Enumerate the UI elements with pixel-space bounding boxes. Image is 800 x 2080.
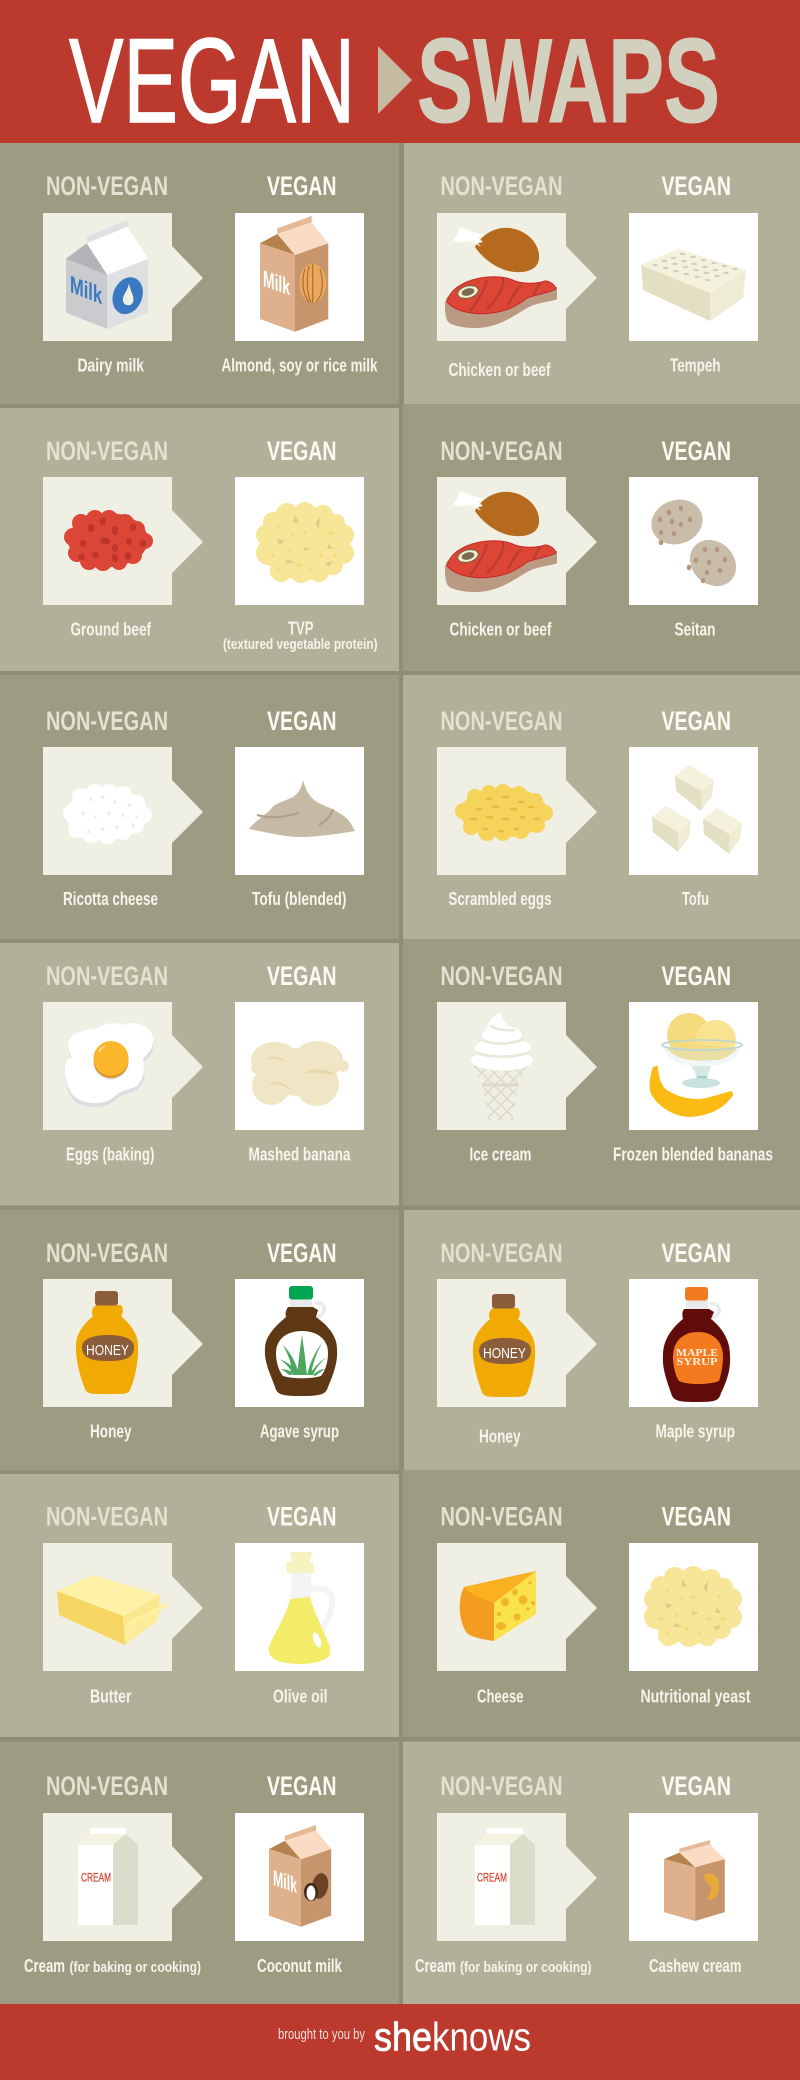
icon: ground beef xyxy=(43,477,203,605)
caption: textured vegetable protein: (textured vegetable protein) xyxy=(223,636,378,653)
panel: cream to cashew cream xyxy=(403,1742,800,2004)
heading: non-vegan: NON-VEGAN xyxy=(46,171,168,201)
icon: coconut milk carton xyxy=(235,1813,364,1941)
heading: vegan: VEGAN xyxy=(267,1771,336,1801)
panel: cheese to nutritional yeast xyxy=(403,1470,800,1737)
panel background xyxy=(0,1210,399,1470)
panel: eggs to mashed banana xyxy=(0,943,399,1206)
icon: chicken and steak xyxy=(437,213,597,341)
icon: tempeh block xyxy=(629,213,758,341)
heading: non-vegan: NON-VEGAN xyxy=(46,1771,168,1801)
header banner xyxy=(0,0,800,148)
heading: non-vegan: NON-VEGAN xyxy=(46,706,168,736)
icon: maple syrup bottle xyxy=(629,1279,758,1407)
panel background xyxy=(0,408,399,671)
panel background xyxy=(403,939,800,1206)
panel: honey to agave syrup xyxy=(0,1210,399,1470)
caption: chicken or beef: Chicken or beef xyxy=(450,620,552,640)
caption: cream for baking or cooking: Cream xyxy=(24,1956,65,1976)
heading: vegan: VEGAN xyxy=(267,1502,336,1532)
panel background xyxy=(403,404,800,671)
heading: non-vegan: NON-VEGAN xyxy=(440,1771,562,1801)
panel background xyxy=(404,143,800,404)
heading: non-vegan: NON-VEGAN xyxy=(440,961,562,991)
caption: olive oil: Olive oil xyxy=(273,1686,328,1706)
icon: milk carton xyxy=(43,213,203,341)
icon: cashew cream carton xyxy=(629,1813,758,1941)
caption: honey: Honey xyxy=(90,1422,132,1442)
icon: banana ice cream and banana xyxy=(629,1002,758,1130)
icon: honey bottle: HONEY xyxy=(86,1342,129,1359)
icon: fried egg xyxy=(43,1002,203,1130)
sheknows logo wordmark: knows xyxy=(432,2016,531,2060)
panel background xyxy=(0,675,399,939)
icon: maple syrup bottle: MAPLE xyxy=(676,1348,718,1359)
heading: non-vegan: NON-VEGAN xyxy=(440,436,562,466)
icon: ricotta cheese xyxy=(43,747,203,875)
icon: maple syrup bottle: SYRUP xyxy=(676,1357,718,1368)
caption: scrambled eggs: Scrambled eggs xyxy=(448,889,552,909)
heading: non-vegan: NON-VEGAN xyxy=(440,171,562,201)
panel: ground beef to TVP xyxy=(0,408,399,671)
caption: tofu blended: Tofu (blended) xyxy=(252,889,347,909)
heading: non-vegan: NON-VEGAN xyxy=(46,961,168,991)
heading: vegan: VEGAN xyxy=(662,1502,731,1532)
caption: butter: Butter xyxy=(90,1686,132,1706)
icon: tofu cubes xyxy=(629,747,758,875)
icon: blended tofu xyxy=(235,747,364,875)
heading: vegan: VEGAN xyxy=(267,436,336,466)
heading: vegan: VEGAN xyxy=(662,436,731,466)
icon: honey bottle xyxy=(437,1279,597,1407)
icon: ice cream cone xyxy=(437,1002,597,1130)
heading: non-vegan: NON-VEGAN xyxy=(46,436,168,466)
panel background xyxy=(0,143,399,404)
heading: non-vegan: NON-VEGAN xyxy=(440,1502,562,1532)
caption: almond soy or rice milk: Almond, soy or rice milk xyxy=(222,356,378,376)
heading: vegan: VEGAN xyxy=(267,171,336,201)
panel background xyxy=(403,675,800,939)
heading: vegan: VEGAN xyxy=(267,706,336,736)
panel: butter to olive oil xyxy=(0,1474,399,1737)
sheknows logo wordmark: she xyxy=(374,2016,432,2060)
panel: chicken or beef to tempeh xyxy=(404,143,800,404)
heading: non-vegan: NON-VEGAN xyxy=(46,1238,168,1268)
caption: coconut milk: Coconut milk xyxy=(257,1956,343,1976)
heading: non-vegan: NON-VEGAN xyxy=(440,706,562,736)
footer credit text: brought to you by xyxy=(278,2026,365,2043)
caption: cream for baking or cooking: Cream xyxy=(415,1956,456,1976)
caption: honey: Honey xyxy=(479,1426,520,1446)
panel background xyxy=(0,943,399,1206)
caption: cream for baking or cooking: (for baking or cooking) xyxy=(460,1959,592,1976)
caption: mashed banana: Mashed banana xyxy=(248,1144,351,1164)
panel: honey to maple syrup xyxy=(404,1210,800,1470)
panel background xyxy=(403,1470,800,1737)
panel background xyxy=(0,1742,399,2004)
caption: tofu: Tofu xyxy=(682,889,709,909)
icon: cream carton xyxy=(43,1813,203,1941)
icon: honey bottle: HONEY xyxy=(483,1345,526,1362)
heading: vegan: VEGAN xyxy=(267,961,336,991)
icon: textured vegetable protein xyxy=(235,477,364,605)
title arrow xyxy=(378,46,412,114)
heading: vegan: VEGAN xyxy=(662,1238,731,1268)
footer banner xyxy=(0,2004,800,2080)
caption: nutritional yeast: Nutritional yeast xyxy=(640,1686,751,1706)
icon: cream carton xyxy=(437,1813,597,1941)
panel: cream to coconut milk xyxy=(0,1742,399,2004)
icon: almond milk carton xyxy=(235,213,364,341)
caption: eggs baking: Eggs (baking) xyxy=(66,1144,154,1164)
heading: non-vegan: NON-VEGAN xyxy=(440,1238,562,1268)
caption: cashew cream: Cashew cream xyxy=(649,1956,742,1976)
icon: butter stick xyxy=(43,1543,203,1671)
heading: non-vegan: NON-VEGAN xyxy=(46,1502,168,1532)
heading: vegan: VEGAN xyxy=(662,961,731,991)
caption: tempeh: Tempeh xyxy=(670,356,720,376)
heading: vegan: VEGAN xyxy=(662,1771,731,1801)
icon: cheese wedge xyxy=(437,1543,597,1671)
caption: TVP: TVP xyxy=(288,618,314,638)
title word: vegan: VEGAN xyxy=(69,14,355,148)
icon: milk carton: Milk xyxy=(70,271,102,310)
panel background xyxy=(404,1210,800,1470)
panel: dairy milk to almond milk xyxy=(0,143,399,404)
heading: vegan: VEGAN xyxy=(267,1238,336,1268)
panel: ice cream to frozen blended bananas xyxy=(403,939,800,1206)
panel background xyxy=(0,1474,399,1737)
caption: cream for baking or cooking: (for baking or cooking) xyxy=(70,1959,201,1976)
caption: maple syrup: Maple syrup xyxy=(656,1422,735,1442)
caption: ice cream: Ice cream xyxy=(470,1144,532,1164)
icon: coconut milk carton: Milk xyxy=(273,1866,297,1898)
panel: ricotta cheese to blended tofu xyxy=(0,675,399,939)
caption: ricotta cheese: Ricotta cheese xyxy=(63,889,158,909)
icon: agave syrup bottle xyxy=(235,1279,364,1407)
icon: cream carton: CREAM xyxy=(477,1872,507,1884)
icon: olive oil bottle xyxy=(235,1543,364,1671)
heading: vegan: VEGAN xyxy=(662,171,731,201)
icon: honey bottle xyxy=(43,1279,203,1407)
panel: scrambled eggs to tofu xyxy=(403,675,800,939)
icon: almond milk carton: Milk xyxy=(263,267,290,301)
icon: seitan pieces xyxy=(629,477,758,605)
heading: vegan: VEGAN xyxy=(662,706,731,736)
caption: dairy milk: Dairy milk xyxy=(78,356,145,376)
caption: chicken or beef: Chicken or beef xyxy=(448,360,551,380)
panel background xyxy=(403,1742,800,2004)
icon: mashed banana xyxy=(235,1002,364,1130)
caption: seitan: Seitan xyxy=(674,620,716,640)
icon: cream carton: CREAM xyxy=(81,1872,111,1884)
caption: agave syrup: Agave syrup xyxy=(260,1422,339,1442)
icon: chicken and steak xyxy=(437,477,597,605)
caption: cheese: Cheese xyxy=(477,1686,524,1706)
caption: ground beef: Ground beef xyxy=(70,620,152,640)
icon: scrambled eggs xyxy=(437,747,597,875)
panel: chicken or beef to seitan xyxy=(403,404,800,671)
icon: nutritional yeast xyxy=(629,1543,758,1671)
